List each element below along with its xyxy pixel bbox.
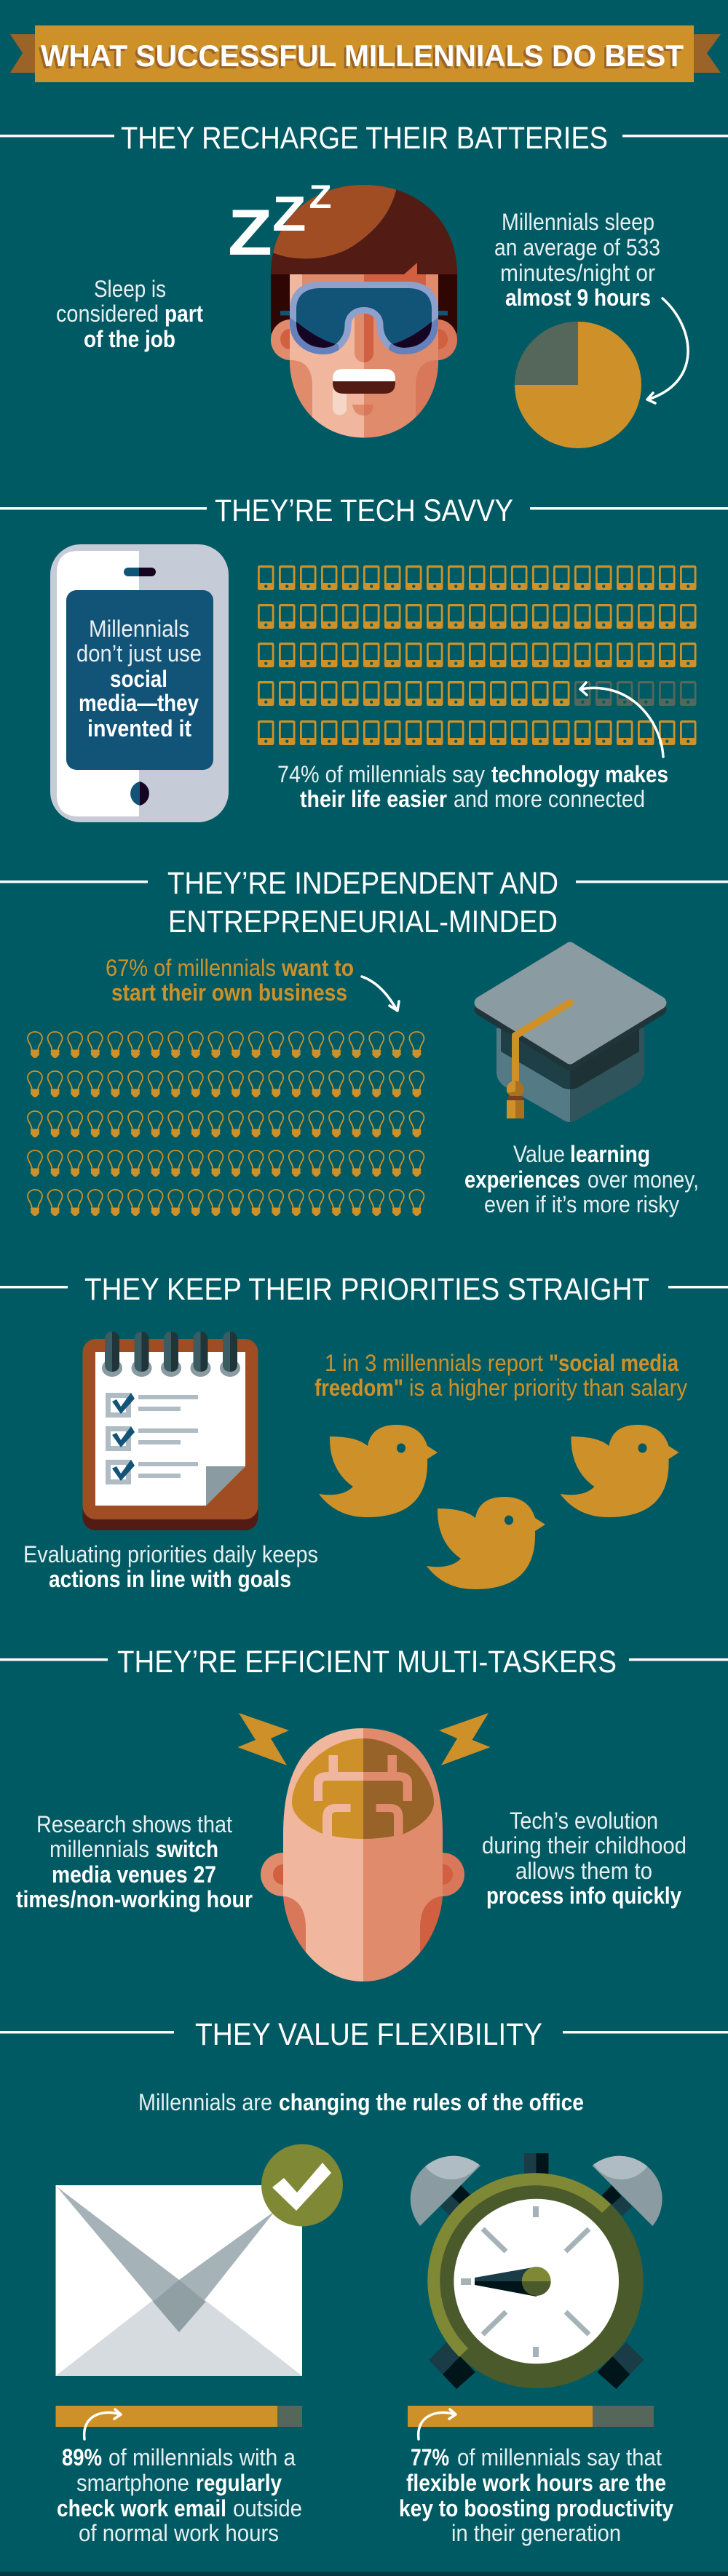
text: millennials sleep 533 minutes: minutes/night or	[500, 260, 655, 286]
icon: large smartphone with text: Millennials	[89, 616, 189, 642]
text: 89 percent check email: of normal work hours	[79, 2520, 279, 2546]
pie chart: sleep	[515, 322, 641, 448]
text: sleep is part of the job: Sleep is	[94, 276, 166, 302]
text: evaluating priorities: Evaluating priorities daily keeps	[23, 1541, 318, 1567]
icon: sleeping head with goggles	[269, 175, 457, 444]
heading: independent and entrepreneurial-minded: THEY’RE INDEPENDENT AND	[167, 866, 558, 901]
arrow: 89 percent	[84, 2409, 121, 2439]
text: changing the rules: Millennials are	[138, 2089, 272, 2115]
text: research shows: millennials	[50, 1836, 149, 1862]
text: social media freedom: freedom"	[314, 1375, 403, 1401]
progress bar: 89 percent	[55, 2406, 302, 2427]
icon array: light bulbs	[28, 1032, 424, 1216]
icon: head with circuit brain	[261, 1725, 464, 1987]
heading: they recharge their batteries: THEY RECHARGE THEIR BATTERIES	[121, 121, 608, 156]
heading: they're tech savvy: THEY’RE TECH SAVVY	[215, 493, 513, 528]
text: value learning experiences: learning	[570, 1141, 650, 1167]
snore letters: Z	[309, 178, 332, 215]
text: social media freedom: "social media	[549, 1350, 678, 1376]
text: 67 percent start a business: start their own business	[111, 979, 347, 1006]
text: sleep is part of the job: considered	[56, 301, 159, 327]
text: 74 percent technology	[277, 761, 668, 812]
snore letters: Z	[272, 186, 306, 242]
text: 74 percent technology: and more connected	[454, 786, 645, 812]
icon: large smartphone with text: media—they	[79, 690, 199, 716]
text: 77 percent flexible hours: key to boosting productivity	[399, 2495, 673, 2521]
text: 89 percent check email: 89%	[62, 2444, 102, 2470]
heading: they're tech savvy	[0, 493, 728, 528]
icon: large smartphone with text: social	[110, 666, 167, 692]
snore letters: Z	[228, 196, 272, 269]
text: sleep is part of the job	[56, 276, 203, 352]
arrow: technology stat	[580, 683, 663, 757]
text: tech's evolution: during their childhood	[482, 1832, 687, 1859]
icon: alarm clock	[411, 2114, 662, 2389]
heading: they keep their priorities straight: THEY KEEP THEIR PRIORITIES STRAIGHT	[84, 1272, 649, 1307]
arrow: business stat to bulbs	[362, 977, 399, 1011]
icon: spiral notepad checklist	[83, 1332, 258, 1530]
text: social media freedom: is a higher priority than salary	[409, 1375, 687, 1401]
text: 89 percent check email: smartphone	[76, 2470, 189, 2496]
text: 89 percent check email: regularly	[196, 2470, 282, 2496]
icon: envelope with check badge	[55, 2144, 343, 2376]
text: 77 percent flexible hours: 77%	[411, 2444, 449, 2470]
snore letters	[228, 178, 332, 269]
text: value learning experiences	[464, 1141, 699, 1217]
heading: they're efficient multi-taskers: THEY’RE EFFICIENT MULTI-TASKERS	[117, 1645, 617, 1679]
text: research shows: switch	[156, 1836, 218, 1862]
text: tech's evolution: allows them to	[515, 1858, 652, 1884]
icon array: phones 74 percent	[258, 565, 696, 745]
footer strip	[0, 2572, 728, 2576]
text: 77 percent flexible hours	[399, 2444, 673, 2546]
text: 74 percent technology: technology makes	[491, 761, 668, 787]
text: 67 percent start a business: 67% of millennials	[106, 955, 276, 981]
title banner	[10, 25, 721, 82]
text: changing the rules: changing the rules of the office	[279, 2089, 584, 2115]
text: tech's evolution	[482, 1808, 687, 1909]
arrow: sleep to pie	[647, 298, 688, 403]
icon: large smartphone with text	[50, 544, 229, 822]
text: social media freedom	[314, 1350, 687, 1401]
text: evaluating priorities: actions in line with goals	[49, 1566, 291, 1592]
text: research shows	[16, 1811, 253, 1912]
text: millennials sleep 533 minutes	[494, 209, 660, 311]
text: 77 percent flexible hours: in their generation	[451, 2520, 621, 2546]
text: 89 percent check email: of millennials with a	[108, 2444, 296, 2470]
icon: graduation cap	[475, 942, 667, 1122]
text: research shows: times/non-working hour	[16, 1886, 253, 1912]
arrow: 77 percent	[419, 2409, 456, 2439]
icon: large smartphone with text: invented it	[87, 715, 191, 742]
title banner: WHAT SUCCESSFUL MILLENNIALS DO BEST	[39, 41, 681, 75]
text: tech's evolution: Tech’s evolution	[510, 1808, 658, 1834]
text: value learning experiences: experiences	[464, 1166, 580, 1193]
heading: independent and entrepreneurial-minded: ENTREPRENEURIAL-MINDED	[168, 905, 558, 939]
text: 77 percent flexible hours: flexible work hours are the	[406, 2470, 666, 2496]
text: value learning experiences: even if it’s more risky	[484, 1191, 679, 1217]
text: tech's evolution: process info quickly	[486, 1883, 681, 1909]
text: 74 percent technology: 74% of millennials say	[277, 761, 485, 787]
text: 89 percent check email	[57, 2444, 302, 2546]
heading: independent and entrepreneurial-minded	[0, 866, 728, 939]
text: value learning experiences: over money,	[587, 1166, 699, 1193]
text: changing the rules	[138, 2089, 584, 2115]
title banner: WHAT SUCCESSFUL MILLENNIALS DO BEST	[41, 39, 684, 73]
icon: lightning bolts	[237, 1713, 491, 1765]
text: millennials sleep 533 minutes: Millennials sleep	[502, 209, 654, 235]
text: millennials sleep 533 minutes: almost 9 hours	[505, 285, 651, 311]
text: millennials sleep 533 minutes: an average of 533	[494, 234, 660, 261]
text: social media freedom: 1 in 3 millennials report	[325, 1350, 543, 1376]
heading: they value flexibility	[0, 2017, 728, 2052]
text: 89 percent check email: check work email	[57, 2495, 226, 2521]
icon: three birds	[319, 1425, 678, 1589]
text: 74 percent technology: their life easier	[300, 786, 447, 812]
icon: large smartphone with text: don’t just use	[76, 640, 202, 667]
text: 89 percent check email: outside	[233, 2495, 302, 2521]
text: 67 percent start a business	[106, 955, 354, 1006]
text: evaluating priorities	[23, 1541, 318, 1592]
text: research shows: media venues 27	[52, 1861, 216, 1888]
text: sleep is part of the job: of the job	[84, 326, 175, 352]
heading: they value flexibility: THEY VALUE FLEXIBILITY	[195, 2017, 542, 2052]
text: 77 percent flexible hours: of millennials say that	[457, 2444, 662, 2470]
text: 67 percent start a business: want to	[281, 955, 354, 981]
text: sleep is part of the job: part	[165, 301, 203, 327]
text: value learning experiences: Value	[513, 1141, 565, 1167]
progress bar: 77 percent	[408, 2406, 654, 2427]
text: research shows: Research shows that	[36, 1811, 232, 1837]
